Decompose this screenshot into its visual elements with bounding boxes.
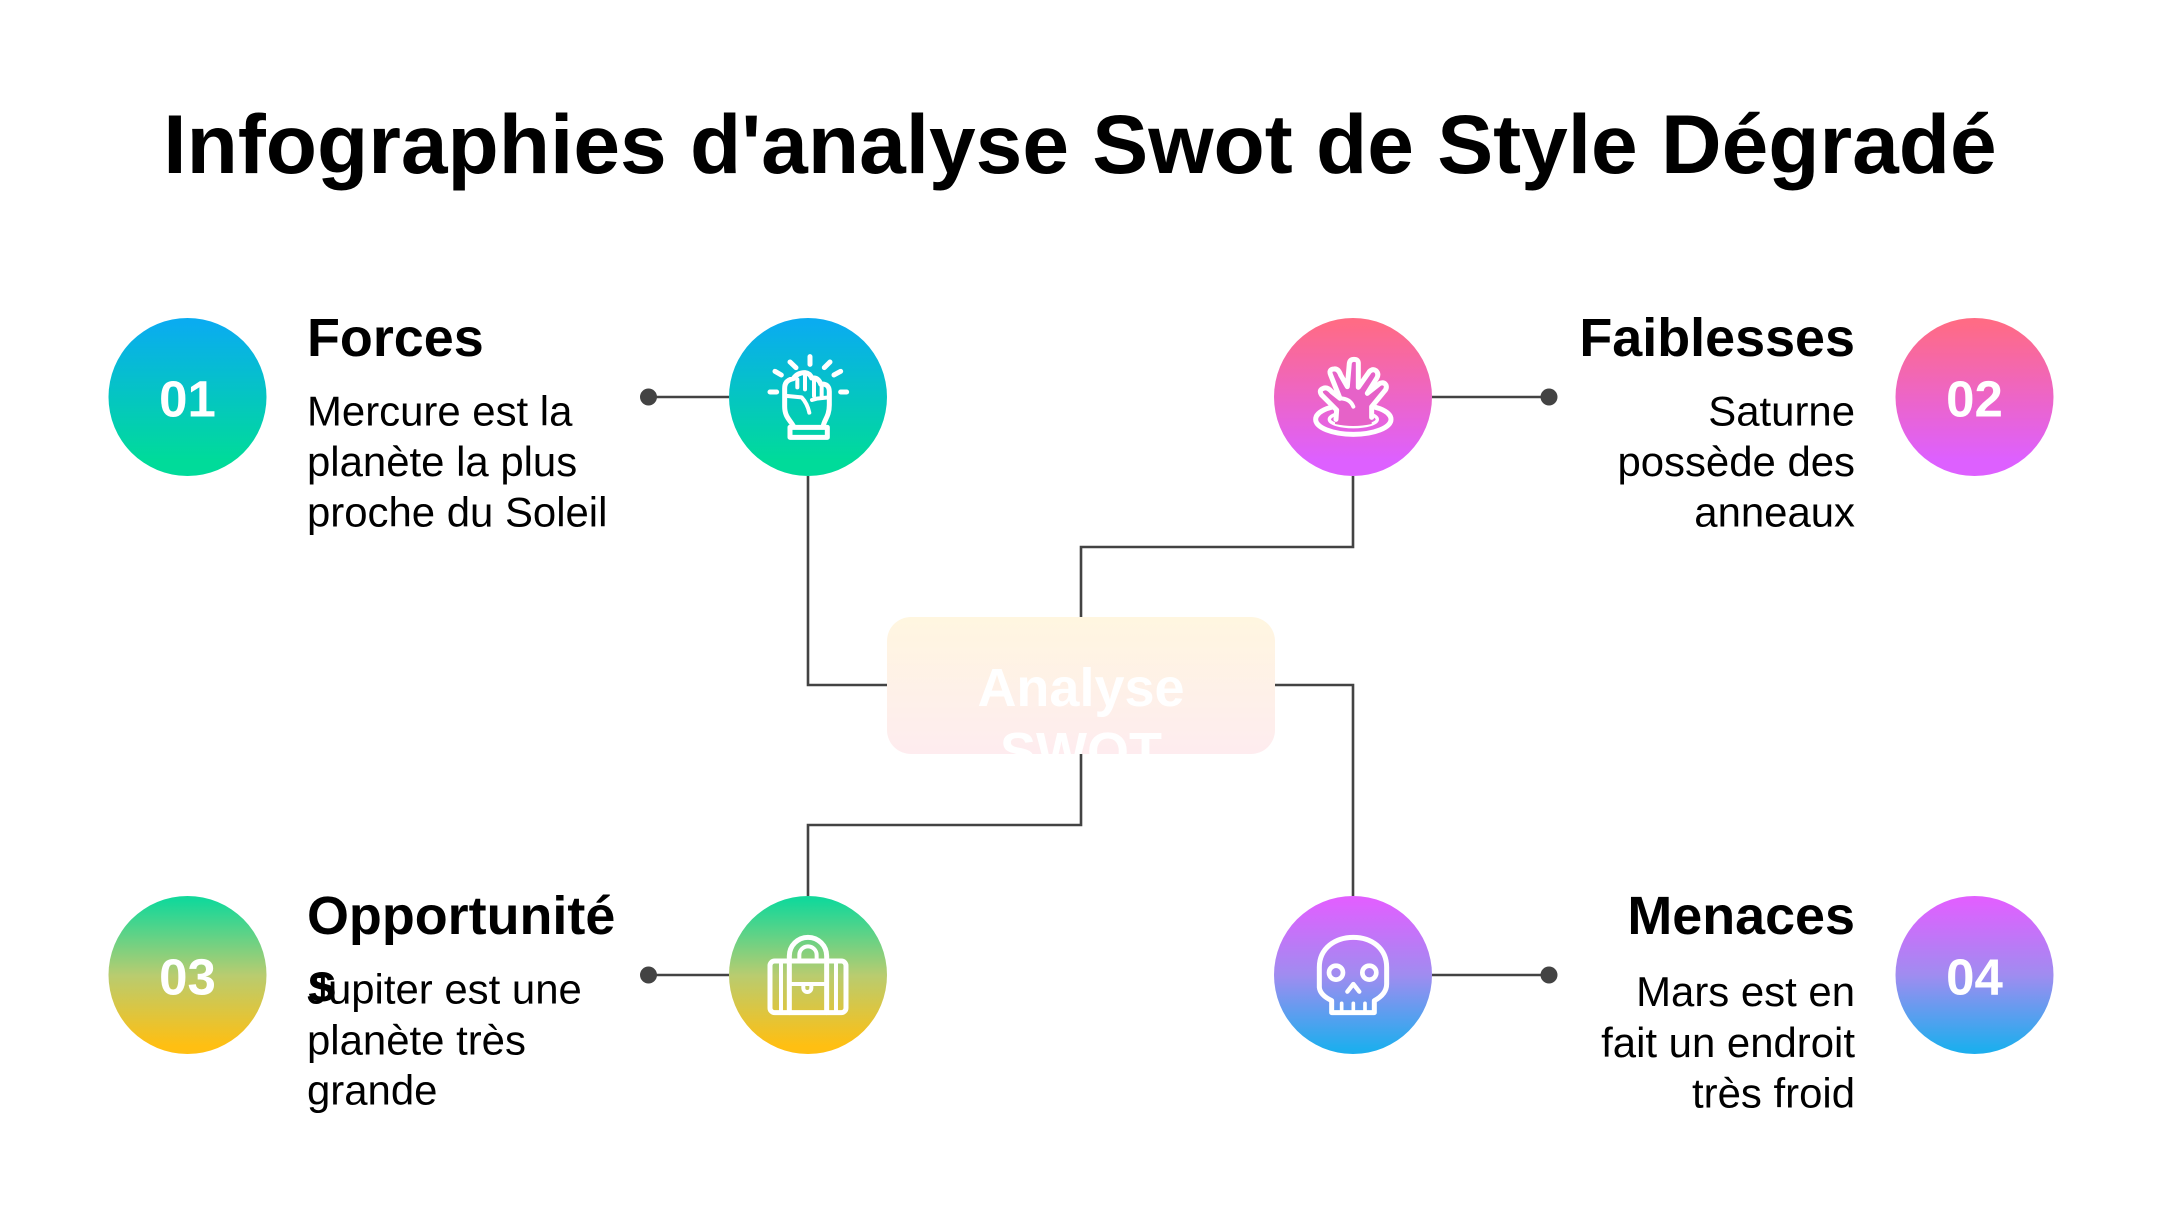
- text: opportunités: Jupiter est une: [307, 965, 582, 1012]
- text: opportunités: grande: [307, 1066, 437, 1114]
- dot connector: menaces: [1432, 966, 1558, 984]
- number badge 02: 02: [1946, 370, 2003, 428]
- text: menaces: fait un endroit: [1601, 1019, 1855, 1066]
- heading: forces: Forces: [307, 308, 484, 368]
- icon: raised fist: [729, 318, 887, 476]
- number badge 04: [1896, 896, 2054, 1054]
- heading: opportunités: Opportunité: [307, 886, 615, 946]
- number badge 03: 03: [159, 948, 216, 1006]
- number badge 01: [108, 318, 266, 476]
- text: forces: planète la plus: [307, 438, 577, 485]
- text: menaces: très froid: [1692, 1070, 1855, 1116]
- dot connector: forces: [640, 388, 729, 406]
- text: opportunités: planète très: [307, 1016, 526, 1063]
- number badge 02: [1896, 318, 2054, 476]
- connectors between icons and central box: [808, 476, 1353, 896]
- icon: skull: [1274, 896, 1432, 1054]
- number badge 04: 04: [1946, 948, 2003, 1006]
- panel: opportunités: [108, 886, 887, 1114]
- panel: menaces: [1274, 886, 2054, 1116]
- text: forces: proche du Soleil: [307, 489, 607, 536]
- dot connector: faiblesses: [1432, 388, 1558, 406]
- central label: Analyse: [977, 658, 1185, 718]
- heading: opportunités: s: [307, 953, 337, 1013]
- central label: SWOT: [1000, 722, 1162, 782]
- text: menaces: Mars est en: [1636, 968, 1855, 1015]
- text: faiblesses: anneaux: [1694, 489, 1855, 536]
- heading: faiblesses: Faiblesses: [1579, 308, 1855, 368]
- number badge 03: [108, 896, 266, 1054]
- icon: hand emerging from ground: [1274, 318, 1432, 476]
- text: forces: Mercure est la: [307, 387, 573, 434]
- title: Infographies d'analyse Swot de Style Dégradé: [163, 97, 1997, 191]
- panel: faiblesses: [1274, 308, 2054, 536]
- icon: briefcase: [729, 896, 887, 1054]
- dot connector: opportunités: [640, 966, 729, 984]
- panel: central box: [887, 617, 1275, 782]
- panel: forces: [108, 308, 887, 536]
- text: faiblesses: possède des: [1617, 438, 1855, 485]
- heading: menaces: Menaces: [1627, 886, 1855, 946]
- text: faiblesses: Saturne: [1708, 387, 1855, 434]
- number badge 01: 01: [159, 370, 216, 428]
